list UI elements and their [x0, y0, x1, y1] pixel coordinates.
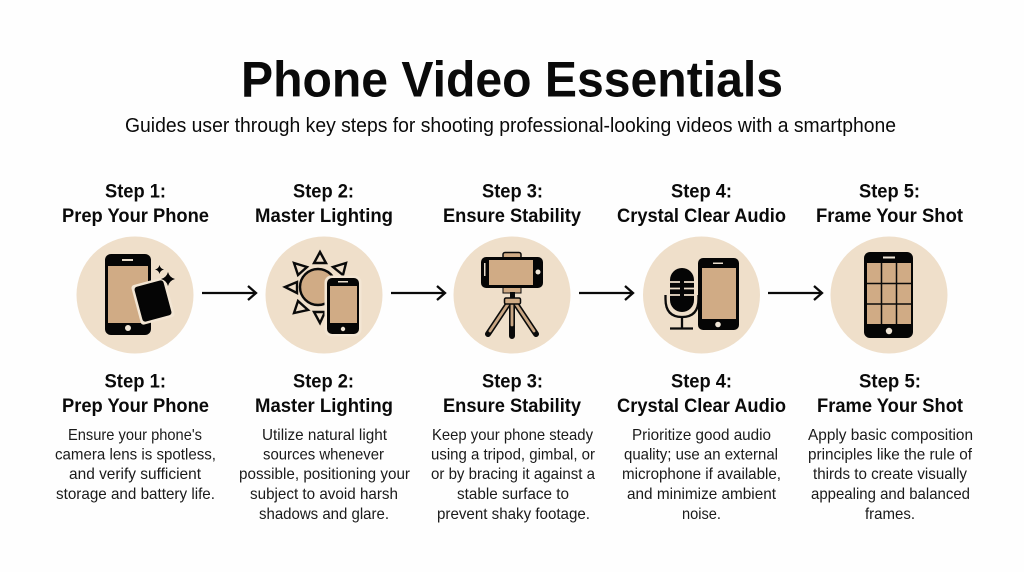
panel: step 5 [808, 180, 973, 523]
step 5 description: frames. [865, 506, 915, 523]
step 3 top heading: Ensure Stability [443, 205, 581, 227]
step 5 description [808, 427, 973, 523]
title: Phone Video Essentials [241, 52, 783, 108]
step 2 lower heading: Master Lighting [255, 395, 393, 417]
panel: step 1 [55, 180, 216, 503]
step 4 top heading: Crystal Clear Audio [617, 205, 786, 227]
step 1 description: storage and battery life. [56, 486, 215, 503]
step 1 top heading: Step 1: [105, 180, 166, 202]
step 1 description: Ensure your phone's [68, 427, 202, 444]
icon: microphone and phone [643, 236, 760, 354]
step 3 top heading: Step 3: [482, 180, 543, 202]
step 1 top heading [62, 180, 209, 227]
panel: step 4 [617, 180, 786, 523]
step 1 lower heading [62, 370, 209, 417]
step 4 description: Prioritize good audio [632, 427, 771, 444]
step 2 description: subject to avoid harsh [250, 486, 398, 503]
step 4 description [622, 427, 781, 523]
icon: sun and phone [266, 236, 382, 354]
step 1 description: and verify sufficient [69, 466, 202, 483]
arrow 4 to 5 [768, 286, 822, 300]
step 3 description: or by bracing it against a [431, 466, 595, 483]
step 1 description [55, 427, 216, 503]
step 2 lower heading [255, 370, 393, 417]
panel: step 2 [239, 180, 411, 523]
step 3 description: using a tripod, gimbal, or [431, 446, 596, 464]
subtitle: Guides user through key steps for shooting professional-looking videos with a smartphone [125, 114, 896, 137]
step 5 top heading: Frame Your Shot [816, 205, 963, 227]
step 3 description [431, 427, 596, 523]
step 3 description: Keep your phone steady [432, 427, 593, 444]
step 2 description: Utilize natural light [262, 427, 388, 444]
step 5 lower heading [817, 370, 963, 417]
icon: phone on tripod [454, 236, 570, 354]
arrow 1 to 2 [202, 286, 256, 300]
step 1 lower heading: Step 1: [104, 370, 166, 392]
step 2 description: possible, positioning your [239, 466, 411, 483]
arrow 2 to 3 [391, 286, 445, 300]
step 5 top heading [816, 180, 963, 227]
icon: phone with rule of thirds grid [830, 236, 948, 354]
step 2 top heading: Step 2: [293, 180, 354, 202]
step 2 top heading: Master Lighting [255, 205, 393, 227]
step 2 description: sources whenever [263, 446, 385, 464]
step 5 top heading: Step 5: [859, 180, 920, 202]
step 4 top heading: Step 4: [671, 180, 732, 202]
step 3 top heading [443, 180, 581, 227]
step 2 lower heading: Step 2: [293, 370, 354, 392]
arrow 3 to 4 [579, 286, 633, 300]
step 5 description: principles like the rule of [808, 446, 973, 464]
step 4 description: noise. [682, 506, 721, 523]
step 3 lower heading: Ensure Stability [443, 395, 581, 417]
step 5 description: Apply basic composition [808, 427, 973, 444]
step 1 lower heading: Prep Your Phone [62, 395, 209, 417]
step 4 top heading [617, 180, 786, 227]
step 5 lower heading: Frame Your Shot [817, 395, 963, 417]
step 2 description: shadows and glare. [259, 506, 389, 523]
step 3 description: prevent shaky footage. [437, 506, 590, 523]
step 2 top heading [255, 180, 393, 227]
icon: phone with cleaning cloth [76, 236, 194, 354]
step 2 description [239, 427, 411, 523]
step 4 lower heading: Crystal Clear Audio [617, 395, 786, 417]
step 4 description: microphone if available, [622, 466, 781, 483]
step 1 top heading: Prep Your Phone [62, 205, 209, 227]
step 4 lower heading: Step 4: [671, 370, 732, 392]
step 4 lower heading [617, 370, 786, 417]
step 3 lower heading: Step 3: [482, 370, 543, 392]
step 5 lower heading: Step 5: [859, 370, 921, 392]
step 3 lower heading [443, 370, 581, 417]
panel: step 3 [431, 180, 596, 523]
step 3 description: stable surface to [457, 486, 569, 503]
step 4 description: quality; use an external [624, 446, 778, 464]
step 4 description: and minimize ambient [627, 486, 777, 503]
step 5 description: appealing and balanced [811, 486, 970, 503]
step 1 description: camera lens is spotless, [55, 446, 216, 464]
step 5 description: thirds to create visually [813, 466, 967, 483]
